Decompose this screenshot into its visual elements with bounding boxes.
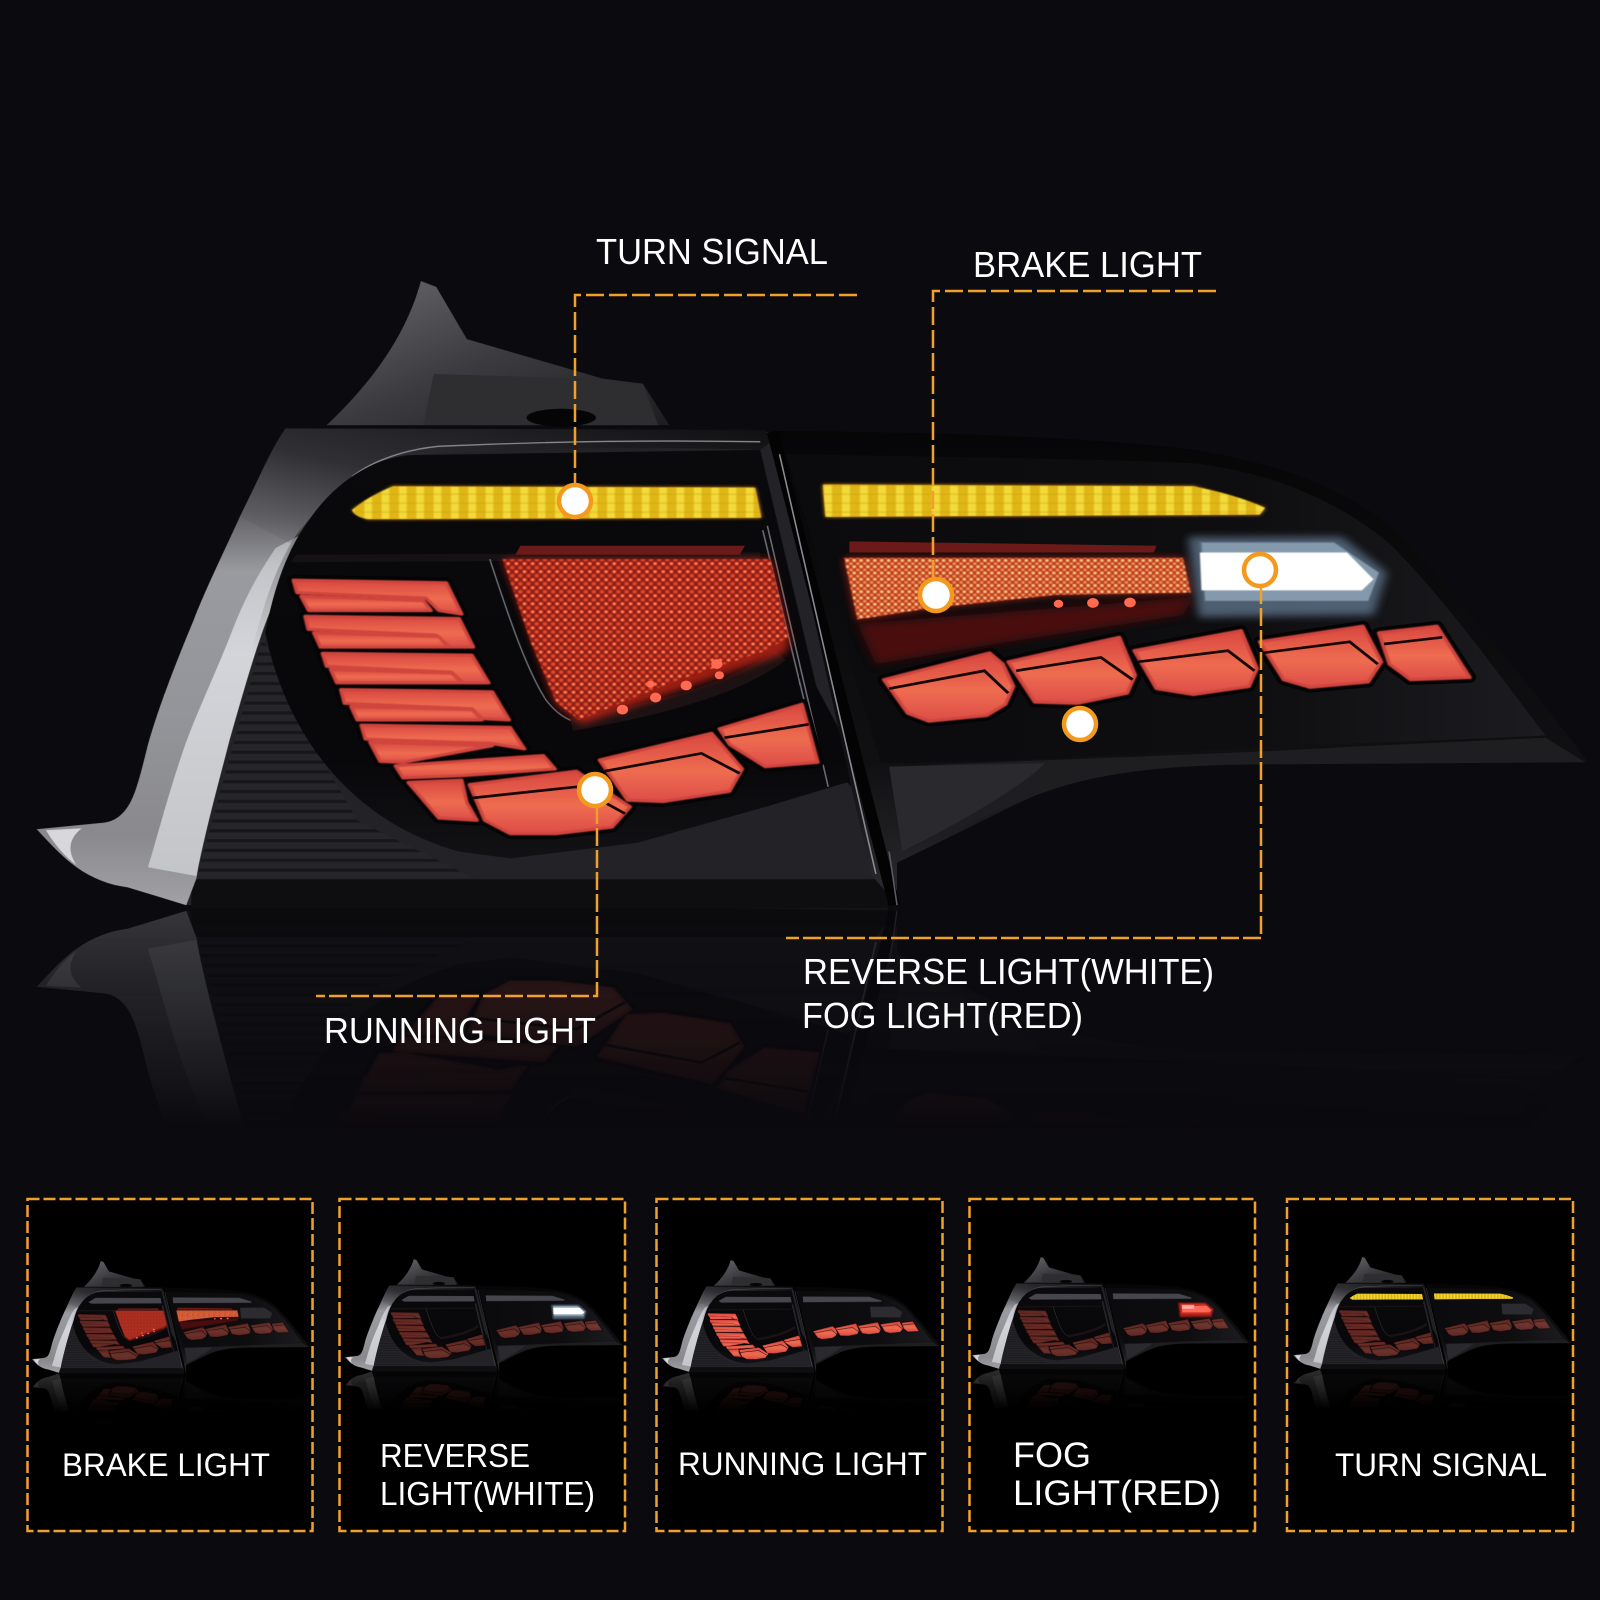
label: RUNNING LIGHT bbox=[678, 1446, 927, 1482]
label: REVERSE bbox=[380, 1437, 530, 1474]
callout: reverse and fog light bbox=[786, 554, 1276, 1036]
label: LIGHT(RED) bbox=[1013, 1474, 1221, 1513]
floor reflection of tail lights bbox=[37, 906, 1588, 1535]
label: LIGHT(WHITE) bbox=[380, 1475, 595, 1512]
label: BRAKE LIGHT bbox=[62, 1447, 270, 1483]
thumbnail: brake light on bbox=[32, 1261, 310, 1485]
label: FOG bbox=[1013, 1436, 1091, 1475]
label: fog light: FOG LIGHT(RED) bbox=[802, 995, 1083, 1036]
leader line bbox=[786, 586, 1261, 938]
lamp housings bbox=[37, 281, 1588, 910]
panel: running light bbox=[656, 1199, 942, 1531]
panel: brake light bbox=[28, 1199, 312, 1531]
callout: running light bbox=[316, 708, 1096, 1051]
marker dot bbox=[920, 579, 952, 611]
thumbnail: reverse light on bbox=[345, 1259, 623, 1483]
panel: fog light bbox=[970, 1199, 1255, 1531]
thumbnail: running light on bbox=[662, 1260, 940, 1484]
label: BRAKE LIGHT bbox=[973, 244, 1202, 285]
marker dot left bbox=[579, 774, 611, 806]
label: RUNNING LIGHT bbox=[324, 1010, 596, 1051]
turn signal bars bbox=[352, 485, 1265, 519]
running light segments bbox=[293, 580, 1470, 834]
callout: turn signal bbox=[559, 231, 857, 517]
leader line bbox=[575, 295, 857, 485]
label: TURN SIGNAL bbox=[596, 231, 828, 272]
leader line bbox=[933, 291, 1216, 578]
marker dot bbox=[559, 485, 591, 517]
brake light mesh bbox=[503, 541, 1194, 724]
callout: brake light bbox=[920, 244, 1216, 611]
thumbnail: fog light on bbox=[972, 1257, 1250, 1481]
reverse light bbox=[1188, 537, 1387, 617]
panel: turn signal bbox=[1287, 1199, 1573, 1531]
label: TURN SIGNAL bbox=[1335, 1447, 1547, 1483]
marker dot bbox=[1244, 554, 1276, 586]
label: reverse light: REVERSE LIGHT(WHITE) bbox=[803, 951, 1214, 992]
marker dot right bbox=[1064, 708, 1096, 740]
panel: reverse light bbox=[340, 1199, 625, 1531]
leader line bbox=[316, 806, 597, 996]
main tail light product illustration bbox=[37, 281, 1588, 910]
thumbnail: turn signal on bbox=[1293, 1257, 1571, 1481]
